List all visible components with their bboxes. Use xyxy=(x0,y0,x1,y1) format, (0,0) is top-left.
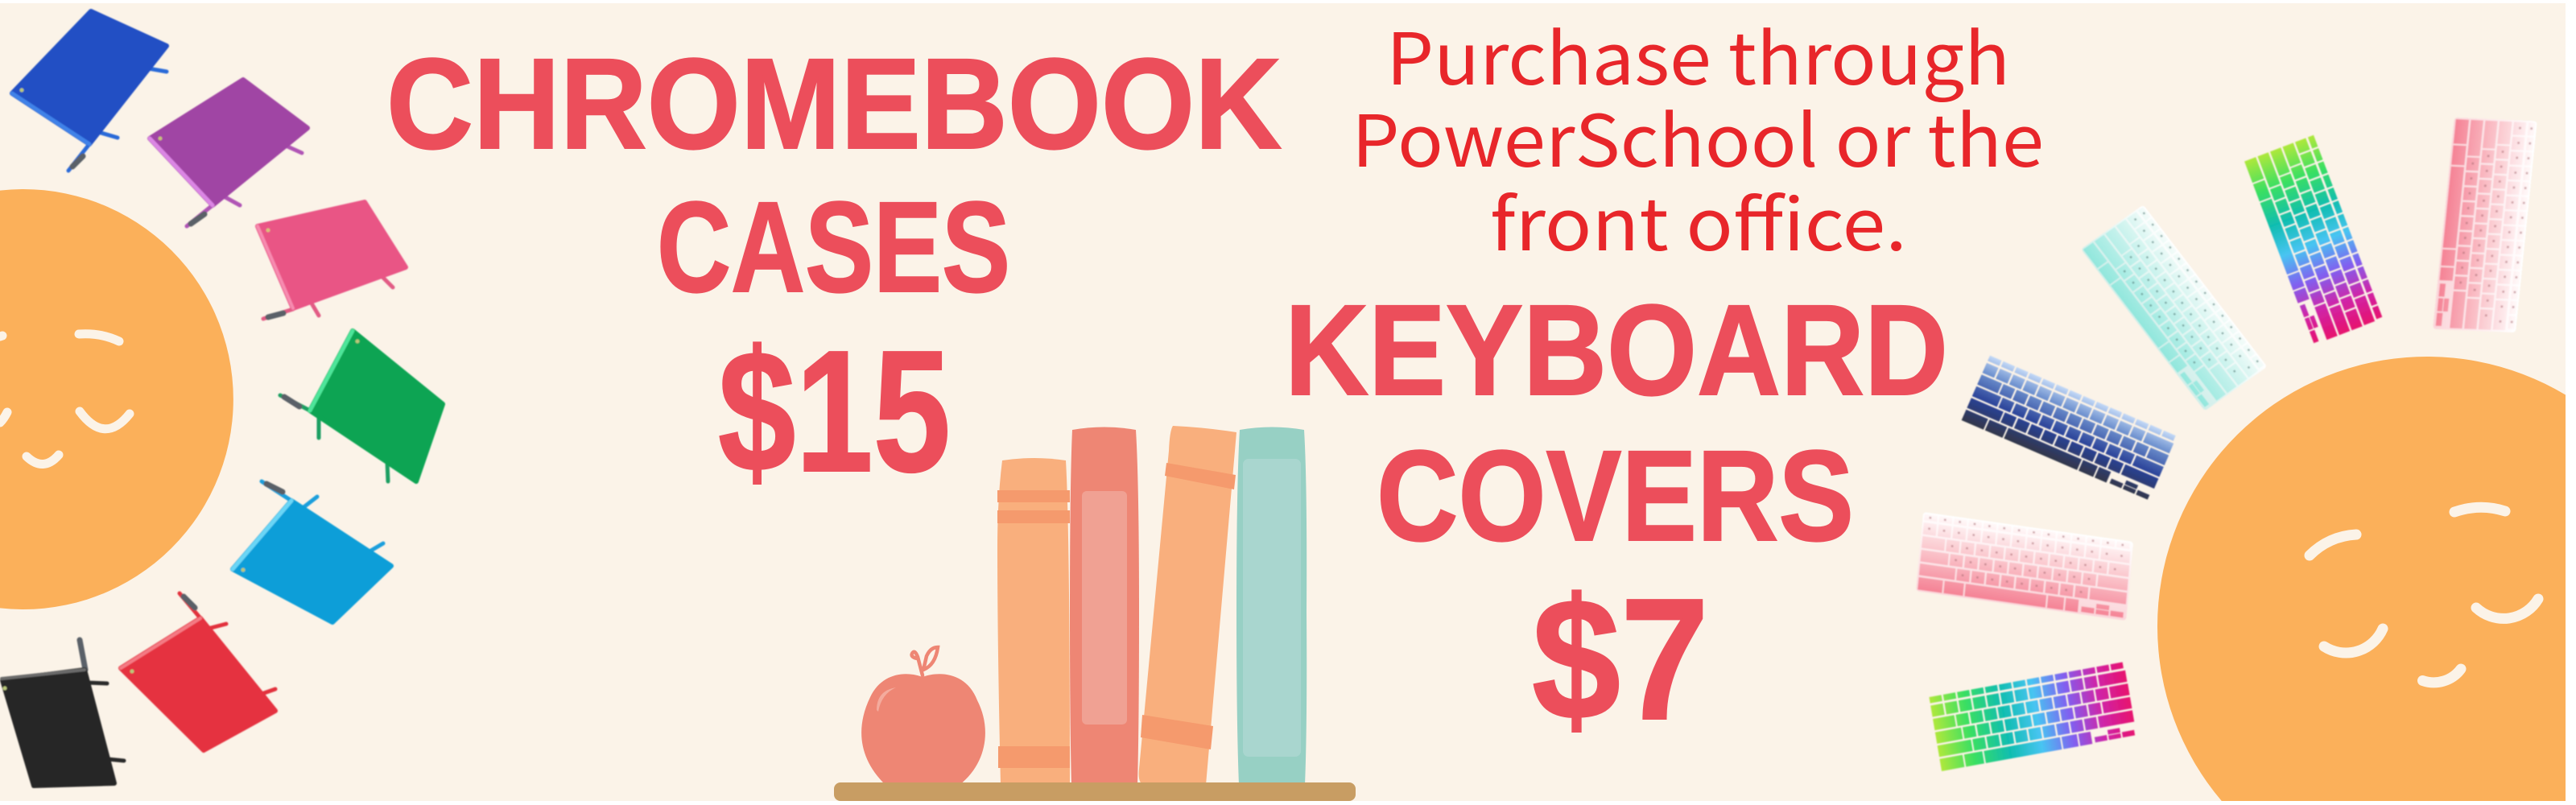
heading: keyboard covers xyxy=(1285,278,1948,756)
sun face xyxy=(2310,507,2538,683)
sun disc xyxy=(0,189,233,609)
line 1: Purchase through xyxy=(1386,2,2010,105)
keyboard: navy xyxy=(1962,356,2178,501)
keyboard: pink horizontal xyxy=(1916,512,2133,621)
chromebook cases fan xyxy=(2,11,443,786)
case: red xyxy=(121,593,275,750)
case: purple xyxy=(150,80,308,226)
price: $15: $15 xyxy=(718,314,951,508)
line: COVERS: COVERS xyxy=(1377,423,1854,568)
case: cyan xyxy=(233,481,391,622)
line 3: front office. xyxy=(1490,167,1907,271)
line: CASES: CASES xyxy=(657,175,1010,319)
price: $7: $7 xyxy=(1532,562,1709,756)
book: salmon xyxy=(1070,427,1139,785)
sun face xyxy=(0,334,130,464)
case: black xyxy=(2,640,124,786)
line: KEYBOARD: KEYBOARD xyxy=(1285,278,1948,422)
book: orange short xyxy=(997,458,1070,785)
sun disc xyxy=(2157,357,2566,801)
line 2: PowerSchool or the xyxy=(1352,84,2044,188)
case: blue xyxy=(12,11,167,171)
left sun xyxy=(0,189,233,609)
heading: chromebook cases xyxy=(386,31,1282,508)
apple xyxy=(861,647,985,785)
book: orange tilted xyxy=(1139,426,1236,785)
shelf xyxy=(834,782,1356,801)
case: green xyxy=(280,331,443,481)
books and apple on shelf xyxy=(834,426,1356,801)
keyboard: mint xyxy=(2081,204,2267,411)
line: CHROMEBOOK: CHROMEBOOK xyxy=(386,31,1282,175)
keyboard covers fan xyxy=(1916,118,2537,771)
right sun xyxy=(2157,357,2566,801)
case: pink xyxy=(258,202,406,319)
purchase note xyxy=(1352,2,2044,271)
keyboard: rainbow horizontal xyxy=(1929,662,2136,771)
keyboard: pink vertical xyxy=(2433,118,2537,332)
keyboard: rainbow vertical xyxy=(2244,135,2383,345)
book: teal xyxy=(1236,427,1307,785)
